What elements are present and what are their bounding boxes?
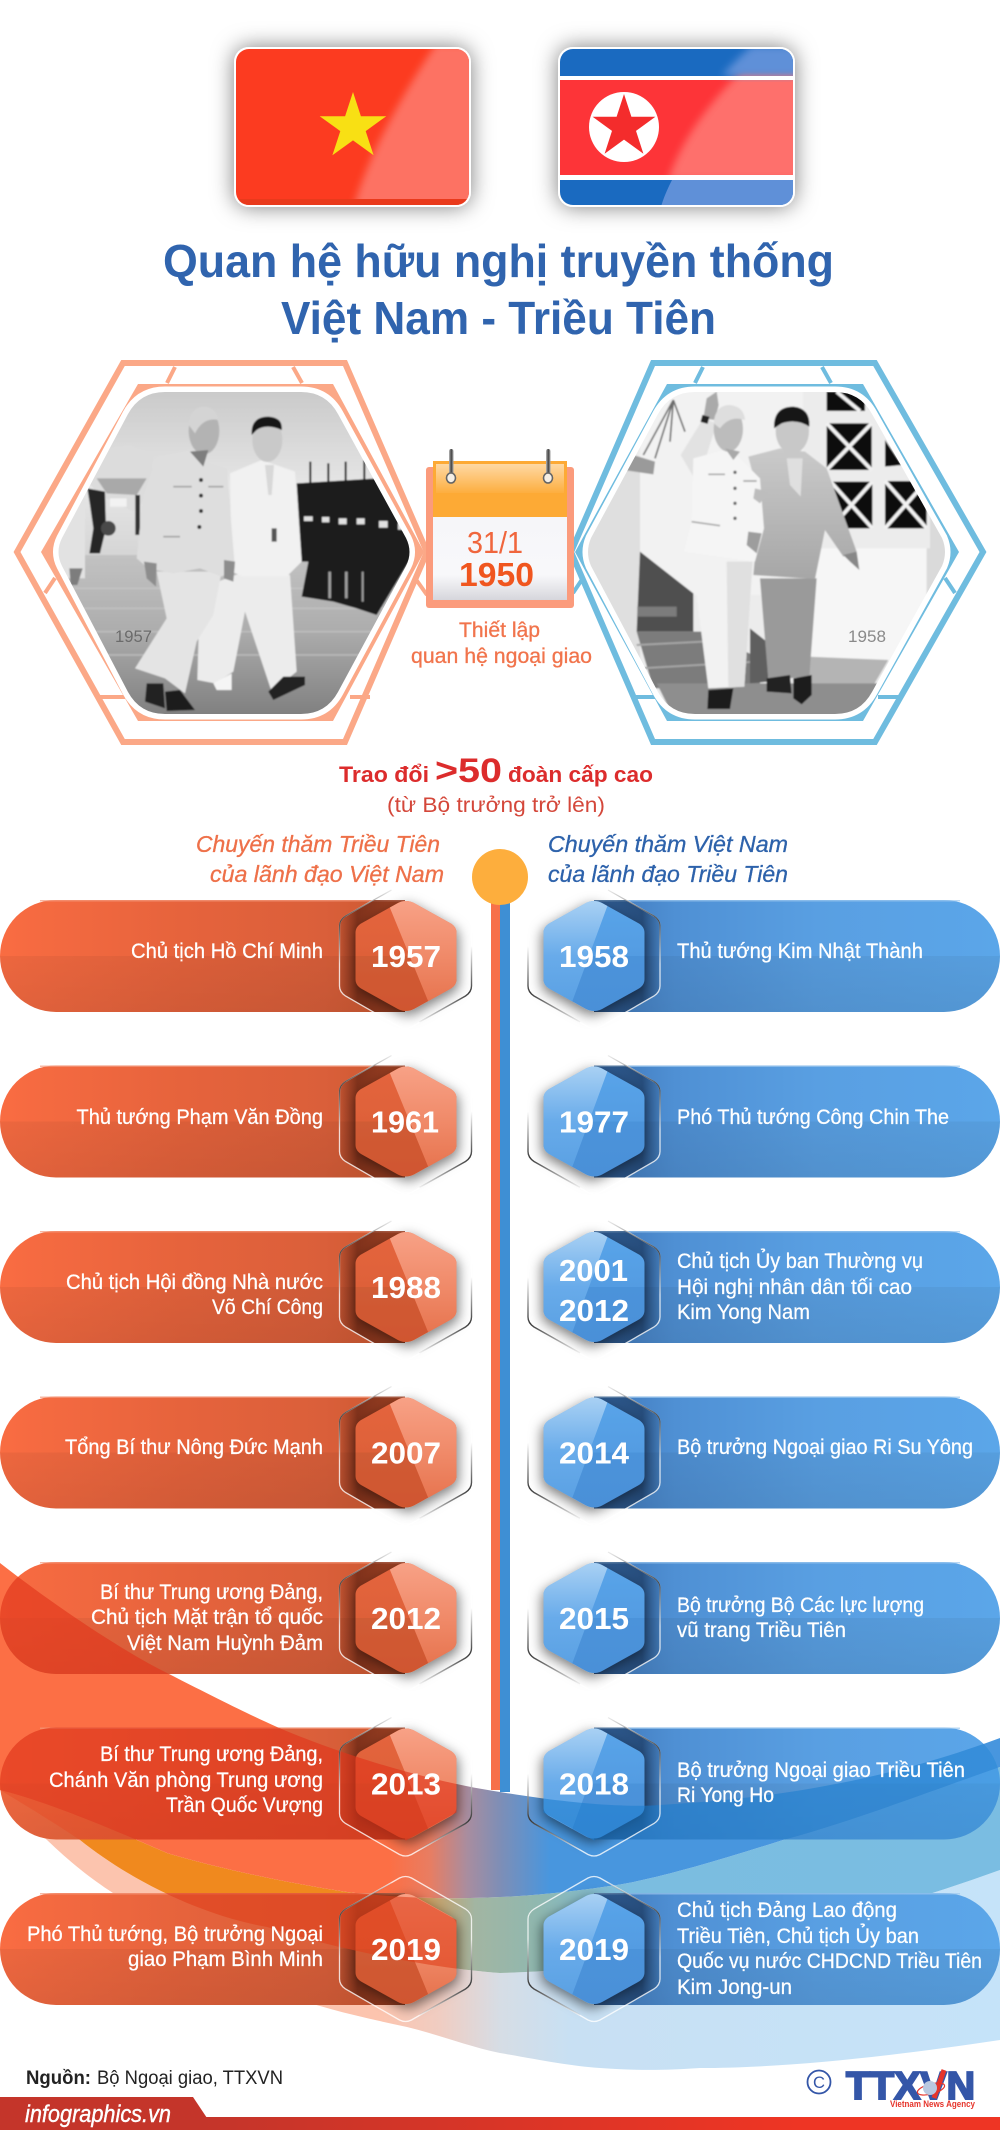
row left: 2013: Trần Quốc Vượng: [166, 1794, 323, 1817]
row left: 1961: 1961: [371, 1104, 439, 1140]
headline: more than 50 high-level delegations: Trao đổi: [339, 762, 429, 787]
photo year label 1957: 1957: [115, 627, 152, 646]
calendar caption: quan hệ ngoại giao: [411, 645, 592, 668]
row right: 2001 and 2012: 2001: [559, 1253, 628, 1288]
row right: 2015: [528, 1546, 1000, 1690]
photo: leaders walking at airport, 1957: [47, 388, 420, 718]
icon: calendar 31/1/1950: 1950: [459, 556, 534, 593]
icon: calendar 31/1/1950: [426, 449, 574, 608]
column heading: visits to Vietnam: của lãnh đạo Triều Tiên: [548, 861, 788, 887]
headline: more than 50 high-level delegations: [339, 752, 653, 817]
flag: Vietnam: [234, 44, 490, 215]
column heading: visits to North Korea: của lãnh đạo Việt Nam: [210, 861, 444, 887]
row right: 2001 and 2012: 2012: [559, 1293, 629, 1328]
row left: 2012: Việt Nam Huỳnh Đảm: [127, 1632, 323, 1655]
row right: 1958: Thủ tướng Kim Nhật Thành: [677, 940, 923, 963]
timeline start dot: [472, 849, 528, 905]
flag: North Korea: [558, 46, 810, 210]
row right: 2015: 2015: [559, 1601, 629, 1636]
row left: 1957: 1957: [371, 939, 441, 974]
row left: 2007: Tổng Bí thư Nông Đức Mạnh: [65, 1436, 323, 1459]
source note: Nguồn:: [26, 2068, 91, 2089]
photo: leaders waving on steps, 1958: [580, 388, 953, 718]
row right: 2015: vũ trang Triều Tiên: [677, 1619, 846, 1642]
footer bar: [0, 2097, 1000, 2130]
row left: 2019: 2019: [371, 1932, 441, 1967]
row right: 2001 and 2012: Chủ tịch Ủy ban Thường vụ: [677, 1249, 923, 1273]
row right: 2019: [528, 1876, 1000, 2022]
logo: TTXVN: Vietnam News Agency: [890, 2099, 976, 2110]
row right: 1977: 1977: [559, 1104, 629, 1140]
row right: 2019: Chủ tịch Đảng Lao động: [677, 1899, 897, 1922]
row right: 2018: 2018: [559, 1766, 629, 1802]
row left: 2012: Bí thư Trung ương Đảng,: [100, 1581, 323, 1604]
icon: calendar 31/1/1950: 31/1: [467, 525, 523, 560]
row right: 2001 and 2012: Kim Yong Nam: [677, 1301, 810, 1324]
background sweep: gold to light-blue band: [0, 1767, 1000, 1973]
row left: 2007: [0, 1380, 472, 1525]
row left: 2013: [0, 1717, 472, 1857]
row right: 1958: 1958: [559, 939, 629, 974]
row right: 2001 and 2012: Hội nghị nhân dân tối cao: [677, 1276, 912, 1299]
calendar caption: [411, 619, 592, 668]
row right: 2019: Quốc vụ nước CHDCND Triều Tiên: [677, 1950, 982, 1973]
source note: Bộ Ngoại giao, TTXVN: [97, 2068, 283, 2089]
column heading: visits to Vietnam: [548, 831, 788, 887]
row right: 1977: Phó Thủ tướng Công Chin The: [677, 1106, 949, 1129]
column heading: visits to Vietnam: Chuyến thăm Việt Nam: [548, 831, 788, 857]
row left: 2012: 2012: [371, 1601, 441, 1636]
row right: 1958: [528, 884, 1000, 1028]
row right: 2018: [527, 1717, 1000, 1857]
row left: 1988: 1988: [371, 1270, 441, 1305]
row right: 2014: 2014: [559, 1436, 630, 1470]
row right: 2019: Triều Tiên, Chủ tịch Ủy ban: [677, 1924, 919, 1948]
row left: 2013: 2013: [371, 1766, 441, 1802]
panel: 1958 photo hexagon: [571, 363, 983, 742]
row left: 2012: [0, 1552, 472, 1685]
row right: 2018: Bộ trưởng Ngoại giao Triều Tiên: [677, 1759, 965, 1782]
headline: more than 50 high-level delegations: đoàn cấp cao: [508, 762, 653, 787]
title: Việt Nam - Triều Tiên: [281, 292, 716, 344]
panel: 1957 photo hexagon: [17, 363, 427, 742]
headline: more than 50 high-level delegations: >50: [435, 752, 502, 790]
row left: 1988: [0, 1214, 472, 1360]
background sweep: pale crescent: [0, 1790, 1000, 2070]
calendar caption: Thiết lập: [459, 619, 540, 642]
logo: TTXVN: C: [813, 2073, 825, 2092]
row left: 2013: Chánh Văn phòng Trung ương: [49, 1769, 323, 1792]
row right: 2014: [528, 1380, 1000, 1525]
column heading: visits to North Korea: Chuyến thăm Triều Tiên: [196, 831, 440, 857]
title: Quan hệ hữu nghị truyền thống: [163, 235, 834, 287]
row left: 1988: Chủ tịch Hội đồng Nhà nước: [66, 1271, 323, 1294]
photo year label 1958: 1958: [848, 627, 886, 646]
row right: 2015: Bộ trưởng Bộ Các lực lượng: [677, 1594, 924, 1617]
row left: 1961: Thủ tướng Phạm Văn Đồng: [76, 1106, 323, 1129]
row right: 2018: Ri Yong Ho: [677, 1784, 774, 1807]
row left: 2019: giao Phạm Bình Minh: [128, 1948, 323, 1971]
headline: more than 50 high-level delegations: (từ Bộ trưởng trở lên): [387, 794, 605, 817]
row right: 2019: Kim Jong-un: [677, 1976, 792, 1999]
title: [163, 235, 834, 344]
row left: 1957: [0, 884, 472, 1028]
row left: 2013: Bí thư Trung ương Đảng,: [100, 1743, 323, 1766]
row right: 1977: [528, 1049, 1000, 1194]
row right: 2014: Bộ trưởng Ngoại giao Ri Su Yông: [677, 1436, 973, 1459]
website label: infographics.vn: [25, 2101, 171, 2128]
timeline spine: [472, 849, 528, 1792]
row left: 2019: [0, 1876, 472, 2022]
row left: 2007: 2007: [371, 1436, 441, 1470]
column heading: visits to North Korea: [196, 831, 444, 887]
background sweep: orange to blue band: [0, 1563, 1000, 1898]
row left: 2019: Phó Thủ tướng, Bộ trưởng Ngoại: [27, 1923, 323, 1946]
row left: 1957: Chủ tịch Hồ Chí Minh: [131, 940, 323, 963]
row right: 2001 and 2012: [528, 1214, 1000, 1360]
row right: 2019: 2019: [559, 1932, 629, 1967]
row left: 1961: [0, 1049, 472, 1194]
row left: 1988: Võ Chí Công: [212, 1296, 323, 1319]
row left: 2012: Chủ tịch Mặt trận tổ quốc: [91, 1606, 323, 1629]
logo: TTXVN: TTXVN: [846, 2065, 975, 2108]
